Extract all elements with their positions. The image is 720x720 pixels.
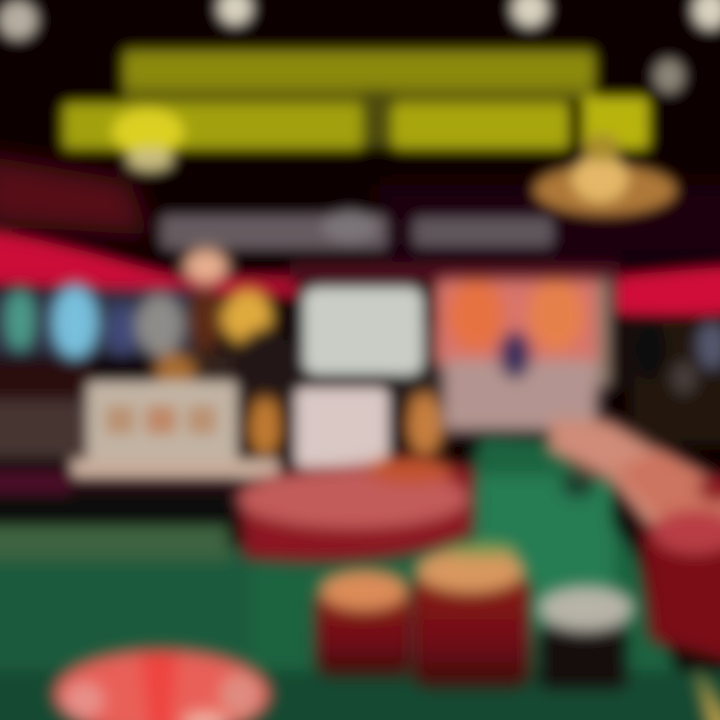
chip stack: foreground left — [316, 570, 412, 676]
red band across the room — [0, 230, 720, 317]
chip stack: black and white — [538, 586, 634, 688]
title: two blurred yellow lines — [62, 48, 650, 150]
card symbols on panel — [106, 406, 216, 434]
bright glow below title, left — [112, 108, 184, 172]
background: upper dark wall — [0, 155, 720, 260]
green felt table — [0, 435, 720, 720]
ornament: golden cluster at right — [533, 134, 677, 216]
white upper panel — [302, 286, 424, 376]
dark machines, right — [630, 320, 720, 445]
chip stack: foreground center — [412, 543, 530, 687]
card table panel, left — [70, 380, 280, 480]
chip stack: right edge — [615, 450, 720, 665]
chip stack: center rear — [236, 456, 474, 562]
colored slot machines, left — [4, 248, 274, 392]
mid-section dark backdrop — [0, 290, 240, 470]
dark table edge — [0, 470, 240, 522]
orange and pink banners, right — [434, 278, 612, 432]
white lower panel — [294, 386, 390, 470]
corner gold accent — [695, 665, 720, 720]
pink tray at right — [548, 420, 720, 530]
subtitle: blurred grey text line — [160, 210, 554, 250]
ceiling lights — [0, 0, 720, 94]
dark figures between panels — [234, 321, 446, 458]
foreground poker chip — [54, 650, 270, 720]
